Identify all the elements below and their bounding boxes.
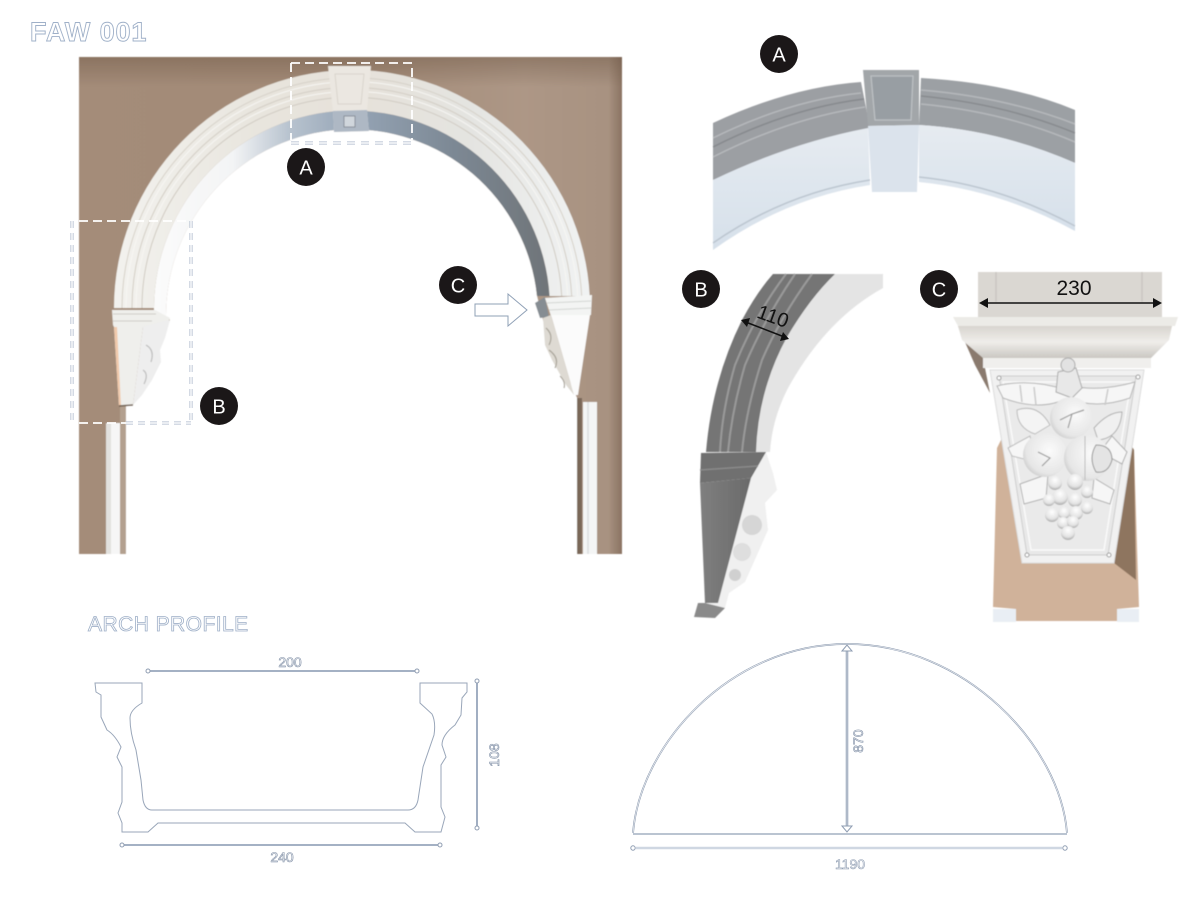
arch soffit — [154, 111, 550, 316]
wall behind corbel — [993, 440, 1139, 621]
left pilaster — [106, 405, 126, 554]
profile cross-section — [95, 683, 467, 832]
badge B detail: B — [694, 280, 708, 302]
dimension 240 — [120, 843, 442, 865]
badge C detail — [920, 270, 958, 308]
fruits — [1050, 397, 1092, 439]
dimension 870: 870 — [850, 729, 866, 753]
badge C on arch: C — [451, 276, 465, 298]
dimension 200 — [146, 654, 419, 673]
badge C on arch — [439, 266, 477, 304]
upper block — [978, 272, 1162, 317]
top wall shadow — [79, 57, 622, 87]
feet — [993, 609, 1016, 622]
arch opening — [126, 129, 577, 554]
corner rosettes — [997, 375, 1140, 557]
dimension 240: 240 — [270, 849, 294, 865]
badge A detail — [760, 35, 798, 73]
badge A on arch — [287, 148, 325, 186]
dimension 110 — [741, 301, 792, 341]
dimension 110: 110 — [754, 301, 792, 333]
arch outline elevation — [633, 644, 1067, 834]
badge A detail: A — [772, 44, 786, 66]
arch face moulding — [114, 70, 590, 308]
dimension 870 — [842, 645, 866, 832]
shadow under cap — [958, 326, 990, 393]
right pilaster — [577, 398, 597, 554]
wall background — [79, 57, 622, 554]
detail B: arch side and corbel — [694, 274, 883, 618]
dimension 1190: 1190 — [835, 856, 865, 872]
badge C detail: C — [932, 280, 946, 302]
dimension 108: 108 — [486, 743, 502, 767]
keystone — [328, 66, 371, 132]
knot — [1056, 368, 1082, 398]
ribbon — [997, 382, 1135, 405]
dashed callout box B — [72, 221, 191, 423]
dashed callout box A — [291, 63, 412, 143]
detail A: keystone section — [713, 70, 1075, 250]
dimension 108 — [475, 679, 502, 830]
arrow to corbel — [475, 294, 527, 326]
photo panel: full arch on wall — [79, 57, 622, 554]
badge B on arch: B — [212, 396, 226, 418]
dimension 200: 200 — [278, 654, 302, 670]
left corbel — [112, 310, 170, 406]
right corbel — [535, 295, 592, 395]
grapes — [1043, 474, 1093, 540]
badge B on arch — [200, 387, 238, 425]
dimension 230 — [979, 277, 1162, 308]
corbel plate — [990, 370, 1144, 563]
dimension 1190 — [631, 846, 1067, 872]
detail C: fruit corbel — [953, 272, 1178, 622]
cap — [953, 317, 1178, 326]
heading: arch profile: ARCH PROFILE — [88, 613, 249, 636]
dimension 230: 230 — [1056, 277, 1092, 300]
badge B detail — [682, 270, 720, 308]
leaves — [1017, 408, 1050, 434]
badge A on arch: A — [299, 158, 313, 180]
title: FAW 001 — [30, 17, 147, 47]
